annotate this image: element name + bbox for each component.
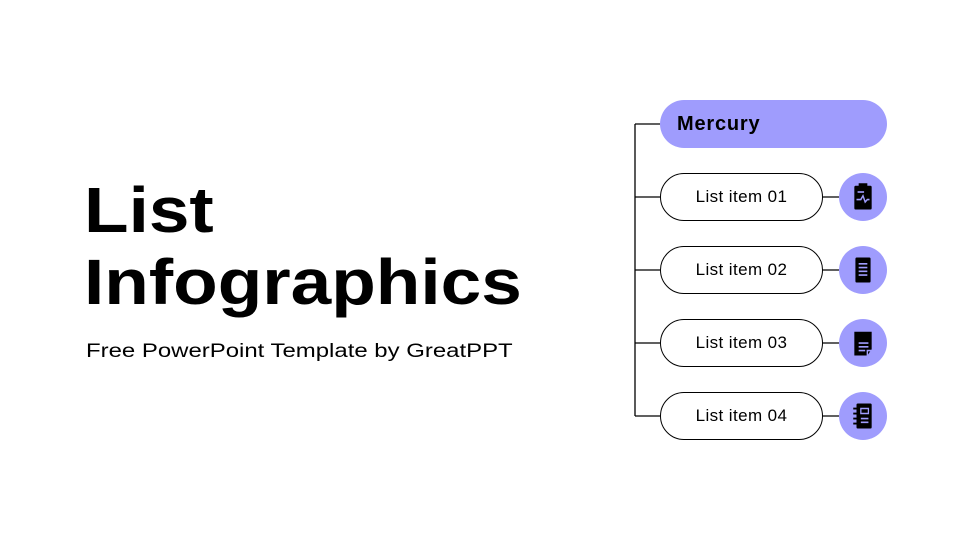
icon: spiral notebook (839, 392, 887, 440)
header: Mercury (660, 100, 887, 148)
item 03: List item 03 (696, 333, 787, 352)
item 02 (660, 246, 823, 294)
icon: notebook (839, 246, 887, 294)
icon: document with clip (839, 319, 887, 367)
title: Infographics (84, 246, 522, 318)
icon: clipboard (839, 173, 887, 221)
item 04 (660, 392, 823, 440)
header: Mercury: Mercury (677, 113, 760, 135)
item 02: List item 02 (696, 260, 787, 279)
item 01: List item 01 (696, 187, 787, 206)
title: List (84, 174, 214, 246)
title (84, 174, 522, 318)
subtitle: Free PowerPoint Template by GreatPPT (86, 341, 513, 362)
item 01 (660, 173, 823, 221)
item 03 (660, 319, 823, 367)
item 04: List item 04 (696, 406, 787, 425)
